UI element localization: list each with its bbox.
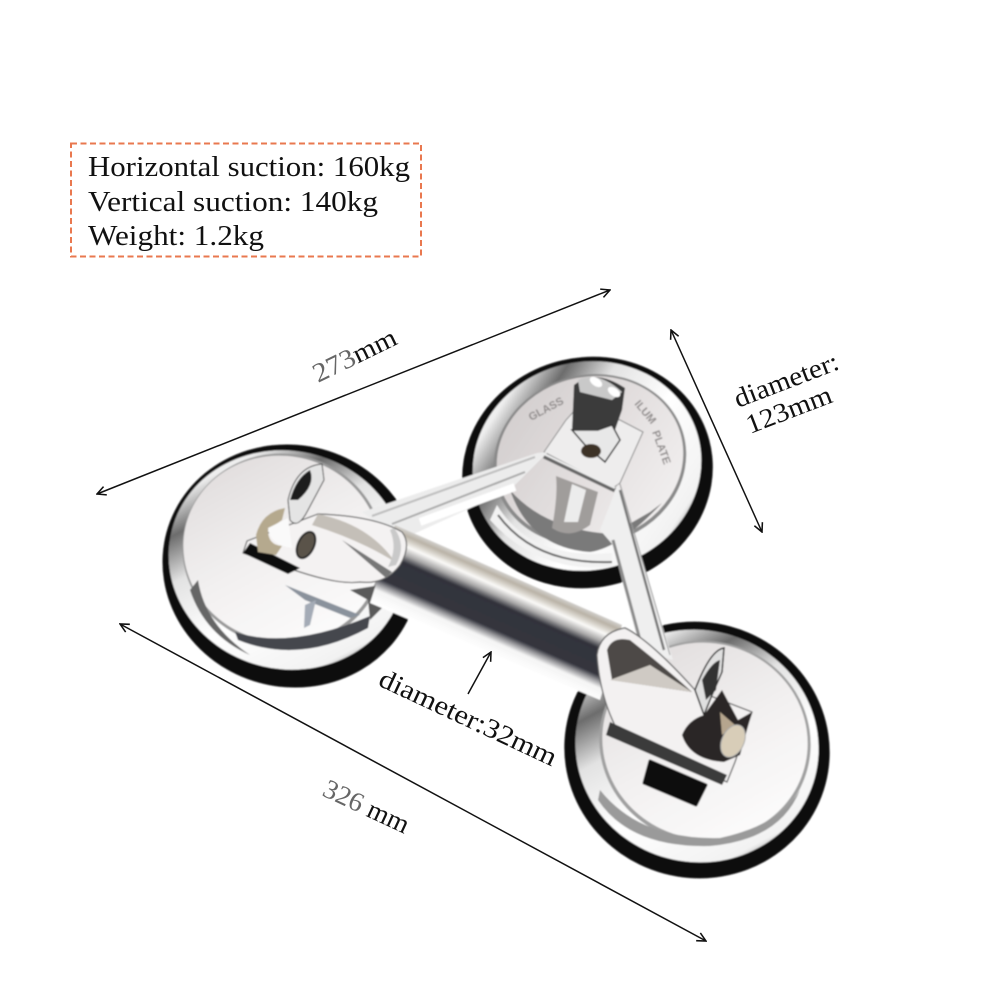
handle tube — [370, 525, 622, 700]
suction cup: top: ILUM — [632, 398, 658, 427]
label: diameter 32mm: diameter:32mm — [374, 663, 562, 772]
clamp handle: top — [544, 375, 643, 490]
suction lifter product illustration — [135, 329, 859, 908]
label: 273mm: 273mm — [307, 322, 402, 388]
handle head: right — [597, 628, 752, 785]
clamp lever: left — [256, 464, 324, 561]
spec text: vertical suction: Vertical suction: 140kg — [88, 187, 378, 218]
dimension arrow: 326mm — [120, 624, 706, 941]
label: diameter 123mm line 1: diameter: — [729, 346, 843, 414]
suction cup: right — [535, 592, 859, 908]
spec text: horizontal suction: Horizontal suction: 160kg — [88, 152, 410, 183]
suction cup: top: PLATE — [649, 429, 673, 466]
spec box — [71, 144, 421, 256]
label: 326 mm: 326 mm — [318, 773, 415, 839]
clamp lever: right — [682, 648, 752, 762]
handle head: left — [243, 464, 407, 583]
release tab — [644, 761, 706, 805]
label: diameter 123mm line 2: 123mm — [741, 379, 836, 440]
suction cup: left — [135, 416, 447, 716]
dimension arrow: cup diameter — [671, 330, 762, 532]
suction cup: top — [436, 329, 739, 616]
triangle arm: right — [600, 484, 673, 660]
embossed plate lettering: GLASS — [527, 395, 566, 424]
spec text: weight: Weight: 1.2kg — [88, 221, 264, 252]
dimension arrow: 273mm — [97, 290, 610, 494]
dimension arrow: tube diameter — [468, 652, 491, 694]
triangle arm: upper — [362, 452, 548, 540]
